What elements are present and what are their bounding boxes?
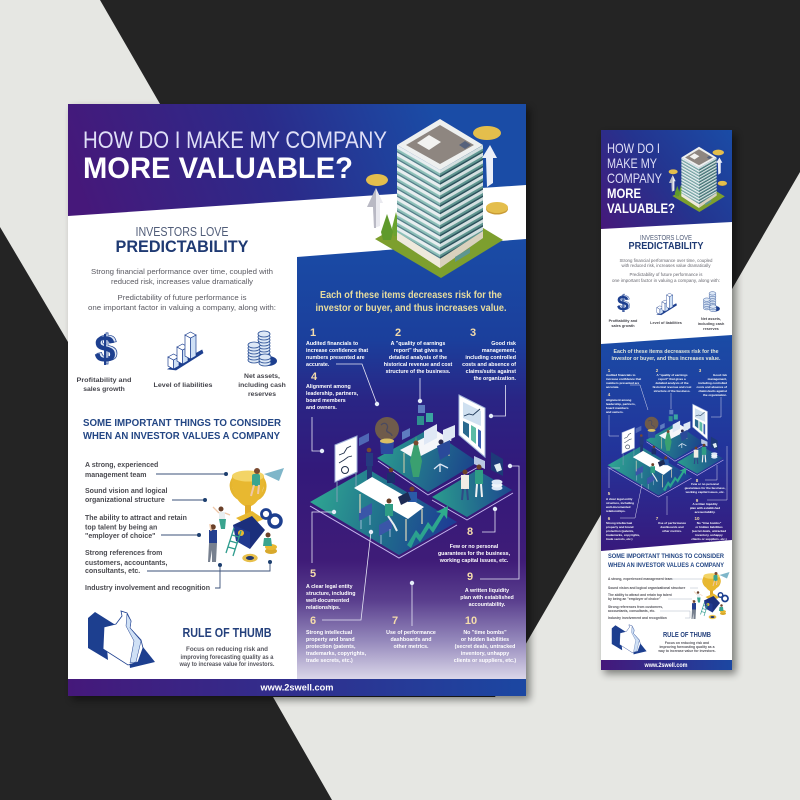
item 8: Few or no personal [450, 544, 499, 550]
side panel heading: investor or buyer, and thus increases value. [612, 356, 721, 362]
side item 10: 10 [694, 516, 700, 521]
side item 6: 6 [608, 516, 611, 521]
side item 3: the organization. [703, 393, 727, 397]
side icon: coins [703, 292, 720, 312]
side item 8: 8 [696, 478, 699, 483]
side icon labels: including cash [698, 322, 725, 326]
icon labels: Profitability and [76, 377, 132, 384]
rule of thumb: improving forecasting quality as a [180, 654, 274, 661]
side item 6: property and brand [606, 525, 634, 529]
item 10: clients or suppliers, etc.) [454, 658, 516, 664]
heading: investors love predictability: INVESTORS LOVE [136, 224, 229, 239]
item 7: 7 [392, 615, 398, 627]
background: light top-left shape [0, 0, 160, 342]
heading: investors love predictability: PREDICTABILITY [116, 237, 249, 256]
item 8 [438, 526, 511, 564]
side item 8 [685, 478, 726, 494]
side item 10: No "time bombs" [697, 521, 722, 525]
item 3: claims/suits against [466, 369, 516, 375]
item 8: 8 [467, 526, 473, 538]
side footer band: www.2swell.com [644, 662, 688, 669]
side item 1: numbers presented are [606, 381, 640, 385]
side intro text: one important factor in valuing a company, along with: [612, 278, 720, 283]
side item 9: A written liquidity [692, 502, 718, 506]
item 10: (secret deals, untracked [455, 644, 515, 650]
side item 10: clients or suppliers, etc.) [691, 537, 727, 541]
side list: accountants, consultants, etc. [608, 609, 655, 613]
side item 3: Good risk [713, 373, 727, 377]
side icon: building [669, 147, 727, 212]
side item 7: other metrics. [662, 529, 682, 533]
side item 3: costs and absence of [696, 385, 727, 389]
list of investor considerations: Sound vision and logical [85, 488, 168, 495]
background: light bottom-right shape [273, 172, 800, 800]
item 9: A written liquidity [465, 588, 509, 594]
side rule of thumb: RULE OF THUMB [663, 632, 711, 639]
list of investor considerations: management team [85, 472, 146, 479]
list of investor considerations: customers, accountants, [85, 560, 168, 567]
item 6: trade secrets, etc.) [306, 658, 353, 664]
side item 9: plan with established [690, 506, 720, 510]
side panel heading: Each of these items decreases risk for the [614, 349, 718, 355]
item 2: detailed analysis of the [389, 355, 447, 361]
side poster [601, 130, 732, 670]
item 7: other metrics. [393, 644, 429, 650]
side rule of thumb: way to increase value for investors. [657, 649, 716, 653]
title: HOW DO I MAKE MY COMPANY [83, 127, 387, 154]
item 5: well-documented [305, 598, 349, 604]
side item 2 [653, 368, 691, 393]
blue panel heading: Each of these items decreases risk for the [320, 290, 502, 301]
side heading: some important things [608, 553, 725, 569]
item 5: structure, including [306, 591, 355, 597]
side item 7: 7 [656, 516, 659, 521]
side heading: INVESTORS LOVE [640, 235, 692, 242]
side footer band [601, 660, 732, 670]
icon: dollar sign: $ [96, 328, 118, 370]
icon: coin stacks [248, 331, 277, 366]
item 4: board members [306, 398, 346, 404]
side illustration: trophy [692, 572, 730, 619]
side item 1 [606, 368, 641, 389]
icon labels [76, 373, 286, 398]
side icon labels [609, 317, 725, 331]
item 1: numbers presented are [306, 355, 365, 361]
side item 4: Alignment among [606, 398, 632, 402]
icon: office building with coins and arrows [366, 119, 508, 278]
item 2: A "quality of earnings [391, 341, 445, 347]
side intro text: Predictability of future performance is [630, 272, 702, 277]
side list: A strong, experienced management team [608, 577, 672, 581]
side item 6 [606, 516, 640, 541]
item 3: management, [482, 348, 517, 354]
item 5 [305, 568, 355, 611]
side list: by being an "employer of choice" [608, 597, 661, 601]
item 7: Use of performance [386, 630, 436, 636]
side item 8: Few or no personal [691, 482, 719, 486]
item 6 [306, 615, 367, 664]
item 1: increase confidence that [306, 348, 368, 354]
item 2: 2 [395, 327, 401, 339]
heading: some important things: WHEN AN INVESTOR VALUES A COMPANY [83, 430, 280, 442]
item 8: guarantees for the business, [438, 551, 511, 557]
item 8: working capital issues, etc. [439, 558, 509, 564]
blue panel heading: investor or buyer, and thus increases value. [316, 303, 507, 314]
side header band [601, 130, 732, 229]
item 10: inventory, unhappy [461, 651, 509, 657]
list of investor considerations: organizational structure [85, 497, 165, 504]
item 2: historical revenue and cost [384, 362, 453, 368]
item 1: Audited financials to [306, 341, 359, 347]
side item 2: A "quality of earnings [657, 373, 688, 377]
side item 9: 9 [696, 498, 699, 503]
list of investor considerations [85, 462, 272, 592]
item 6: property and brand [306, 637, 355, 643]
icon: dollar sign: $ [94, 329, 116, 371]
side item 3: claims/suits against [698, 389, 727, 393]
side item 1: Audited financials to [606, 373, 636, 377]
side item 8: working capital issues, etc. [685, 490, 725, 494]
item 3: including controlled [465, 355, 516, 361]
side item 4 [606, 392, 636, 414]
icon labels: reserves [248, 391, 276, 398]
side rule of thumb: Focus on reducing risk and [665, 641, 709, 645]
side item 2: report" that gives a [658, 377, 686, 381]
list of investor considerations: "employer of choice" [85, 533, 155, 540]
side item 5: 5 [608, 491, 611, 496]
item 7 [386, 615, 436, 650]
side icon labels: sales growth [611, 324, 635, 328]
icon: thumbs up [88, 611, 155, 668]
main poster white base [68, 104, 526, 696]
main poster shadow [72, 108, 530, 700]
side poster white base [601, 130, 732, 670]
side list: Strong references from customers, [608, 605, 663, 609]
side item 7 [656, 516, 686, 533]
side item 4: board members [606, 406, 629, 410]
side item 1: accurate. [606, 385, 619, 389]
side icon: bars [657, 293, 677, 315]
side item 1: increase confidence that [606, 377, 641, 381]
side item 10 [691, 516, 727, 541]
icon: bar columns [168, 332, 203, 370]
item 6: Strong intellectual [306, 630, 353, 636]
item 9: 9 [467, 571, 473, 583]
icon labels: Level of liabilities [154, 382, 213, 389]
item 1: accurate. [306, 362, 330, 368]
side item 5: well-documented [605, 505, 631, 509]
side item 7: Use of performance [658, 521, 686, 525]
rule of thumb: Focus on reducing risk and [186, 646, 268, 653]
side list: The ability to attract and retain top talent [608, 593, 673, 597]
title [83, 127, 387, 185]
intro text: Strong financial performance over time, coupled with [91, 267, 273, 276]
side intro text [612, 258, 720, 283]
intro text: reduced risk, increases value dramatically [111, 277, 253, 286]
side item 9 [690, 498, 720, 514]
side item 2: detailed analysis of the [655, 381, 689, 385]
side item 2: structure of the business. [654, 389, 690, 393]
item 2: report" that gives a [394, 348, 442, 354]
illustration: trophy with team [208, 468, 284, 562]
side icon labels: Profitability and [609, 319, 638, 323]
item 6: trademarks, copyrights, [306, 651, 367, 657]
heading: some important things [83, 417, 281, 442]
item 6: 6 [310, 615, 316, 627]
side panel heading [612, 349, 721, 362]
item 9: plan with established [460, 595, 514, 601]
icon labels: sales growth [83, 386, 125, 393]
item 4: Alignment among [306, 384, 351, 390]
callout lines [312, 364, 519, 626]
main poster [68, 104, 526, 696]
blue panel heading [316, 290, 507, 314]
side heading: some important things: SOME IMPORTANT THINGS TO CONSIDER [608, 553, 724, 560]
item 3: the organization. [474, 376, 517, 382]
list of investor considerations: A strong, experienced [85, 462, 158, 469]
side item 7: dashboards and [660, 525, 684, 529]
item 9 [460, 571, 514, 608]
side item 3: including controlled [698, 381, 727, 385]
item 10: No "time bombs" [463, 630, 507, 636]
side item 5: A clear legal entity [606, 497, 633, 501]
item 7: dashboards and [391, 637, 431, 643]
item 1: 1 [310, 327, 316, 339]
side item 10: or hidden liabilities [695, 525, 723, 529]
item 1 [306, 327, 368, 368]
heading: investors love predictability [116, 224, 249, 256]
rule of thumb: RULE OF THUMB [182, 626, 272, 640]
side list: Sound vision and logical organizational structure [608, 586, 685, 590]
side title: MORE [607, 185, 641, 201]
side item 5 [605, 491, 634, 513]
side item 9: accountability. [695, 510, 716, 514]
item 2: structure of the business. [386, 369, 451, 375]
list of investor considerations: top talent by being an [85, 524, 157, 532]
rule of thumb: way to increase value for investors. [179, 661, 275, 668]
item 3: Good risk [491, 341, 516, 347]
icon labels: Net assets, [244, 373, 280, 380]
illustration: office platforms [310, 395, 513, 558]
icon labels: including cash [238, 382, 286, 389]
item 4: and owners. [306, 405, 337, 411]
item 5: 5 [310, 568, 316, 580]
item 4: leadership, partners, [306, 391, 359, 397]
item 10: 10 [465, 615, 477, 627]
intro text [88, 267, 276, 312]
side title: COMPANY [607, 170, 663, 186]
item 10 [454, 615, 516, 664]
list of investor considerations: consultants, etc. [85, 568, 140, 575]
side item 8: guarantees for the business, [685, 486, 726, 490]
side item 2: 2 [656, 368, 659, 373]
side list [608, 577, 702, 620]
side item 10: (secret deals, untracked [692, 529, 726, 533]
side item 5: structure, including [606, 501, 634, 505]
item 3 [462, 327, 517, 382]
footer band [68, 679, 526, 696]
item 9: accountability. [469, 602, 506, 608]
side rule of thumb: improving forecasting quality as a [659, 645, 715, 649]
side illustration [608, 404, 723, 497]
side icon labels: Net assets, [701, 317, 721, 321]
item 5: relationships. [306, 605, 341, 611]
side poster shadow [604, 134, 736, 674]
heading: some important things: SOME IMPORTANT THINGS TO CONSIDER [83, 417, 281, 429]
side item 4: and owners. [606, 410, 624, 414]
list of investor considerations: Industry involvement and recognition [85, 585, 210, 592]
side heading [628, 235, 704, 252]
side item 6: Strong intellectual [606, 521, 632, 525]
list of investor considerations: The ability to attract and retain [85, 515, 187, 522]
header band [68, 104, 526, 216]
side icon labels: Level of liabilities [650, 321, 682, 325]
blue panel [297, 239, 526, 680]
side blue panel [601, 335, 732, 551]
item 3: costs and absence of [462, 362, 516, 368]
side icon: dollar [617, 290, 630, 315]
footer band: www.2swell.com [260, 682, 334, 694]
side item 1: 1 [608, 368, 611, 373]
side item 4: 4 [608, 392, 611, 397]
title: MORE VALUABLE? [83, 152, 353, 185]
item 5: A clear legal entity [306, 584, 353, 590]
side item 6: protection (patents, [606, 529, 634, 533]
side callout lines [609, 385, 727, 518]
side heading: PREDICTABILITY [628, 241, 704, 252]
side title [607, 140, 675, 216]
list of investor considerations: Strong references from [85, 550, 162, 557]
side heading: some important things: WHEN AN INVESTOR VALUES A COMPANY [608, 562, 725, 569]
item 4 [306, 371, 359, 411]
item 10: or hidden liabilities [461, 637, 509, 643]
side item 6: trade secrets, etc.) [606, 537, 633, 541]
side intro text: with reduced risk, increases value dramatically [622, 263, 711, 268]
side item 3 [696, 368, 727, 397]
side item 2: historical revenue and cost [653, 385, 691, 389]
side title: VALUABLE? [607, 200, 675, 216]
side rule of thumb [657, 632, 716, 653]
item 4: 4 [311, 371, 318, 383]
side icon: thumb [612, 625, 647, 654]
side title: HOW DO I [607, 140, 660, 156]
rule of thumb [179, 626, 275, 668]
side item 3: management, [708, 377, 727, 381]
side intro text: Strong financial performance over time, coupled [620, 258, 713, 263]
item 6: protection (patents, [306, 644, 356, 650]
side item 6: trademarks, copyrights, [606, 533, 640, 537]
side list: Industry involvement and recognition [608, 616, 667, 620]
item 2 [384, 327, 453, 375]
side icon labels: reserves [703, 327, 719, 331]
intro text: one important factor in valuing a company, along with: [88, 303, 276, 312]
side item 3: 3 [699, 368, 702, 373]
side title: MAKE MY [607, 155, 658, 171]
side item 10: inventory, unhappy [695, 533, 723, 537]
side item 4: leadership, partners, [606, 402, 636, 406]
intro text: Predictability of future performance is [118, 293, 247, 302]
item 3: 3 [470, 327, 476, 339]
side item 5: relationships. [606, 509, 626, 513]
